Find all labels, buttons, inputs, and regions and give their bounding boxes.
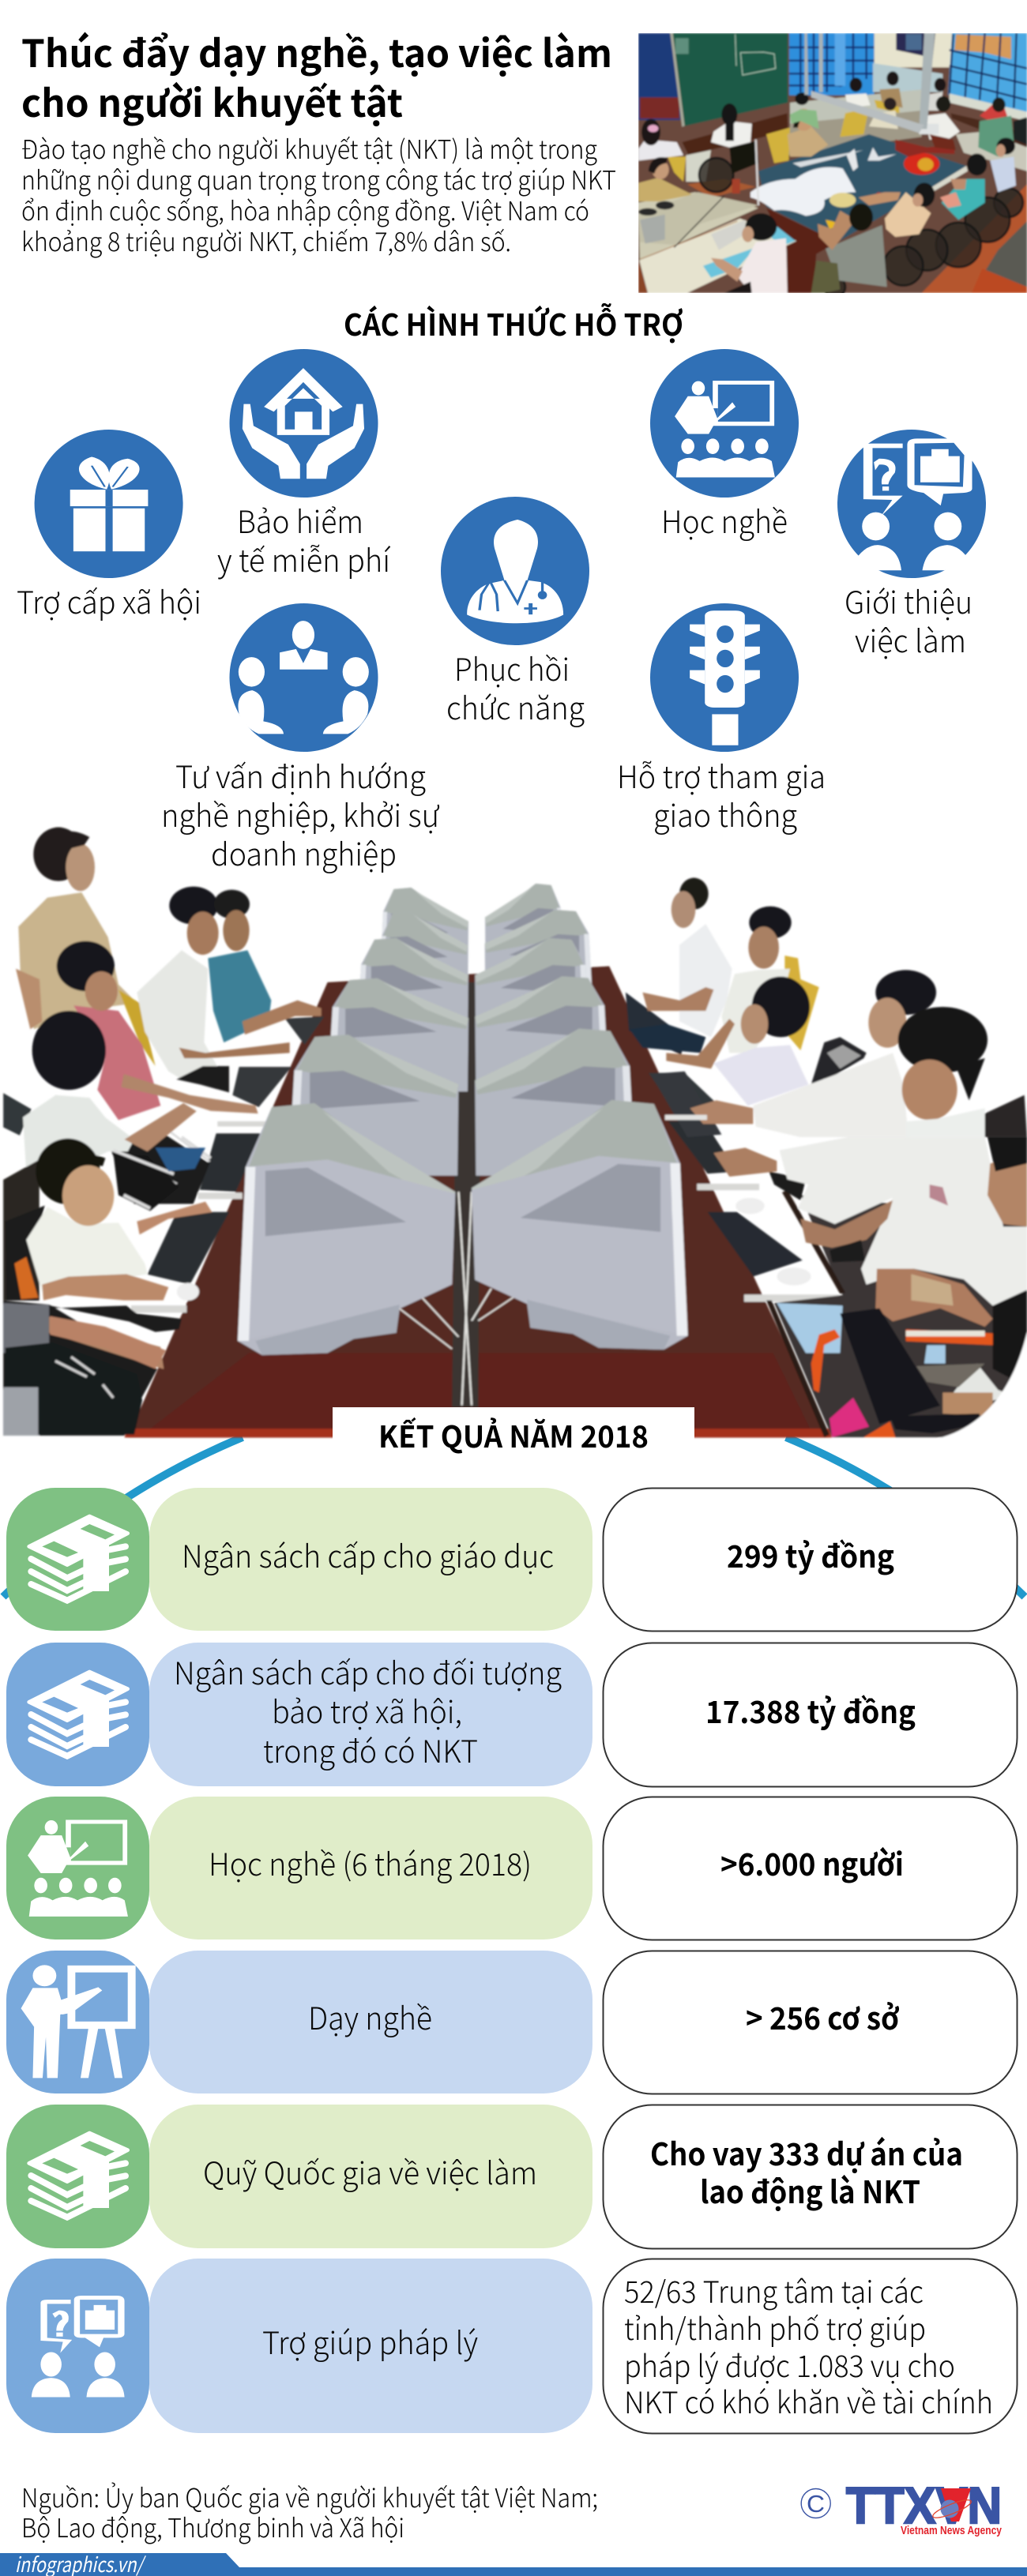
row: national employment fund xyxy=(6,2105,1018,2249)
row: legal aid: 52/63 Trung tâm tại các xyxy=(624,2268,924,2311)
title: cho người khuyết tật xyxy=(21,73,403,128)
icon: house in hands xyxy=(243,368,364,479)
intro text xyxy=(21,129,616,259)
row: legal aid: pháp lý được 1.083 vụ cho xyxy=(624,2342,955,2386)
row: legal aid: NKT có khó khăn về tài chính xyxy=(624,2379,993,2422)
item: career counselling: doanh nghiệp xyxy=(211,831,397,875)
intro text: những nội dung quan trọng trong công tác trợ giúp NKT xyxy=(21,160,616,197)
row: social protection budget: Ngân sách cấp cho đối tượng xyxy=(174,1650,562,1694)
row: national employment fund: lao động là NKT xyxy=(700,2169,920,2213)
icon: money stack xyxy=(29,2133,128,2217)
row: social protection budget xyxy=(6,1643,1018,1786)
title xyxy=(21,23,612,128)
intro text: ổn định cuộc sống, hòa nhập cộng đồng. Việt Nam có xyxy=(21,190,589,228)
intro text: khoảng 8 triệu người NKT, chiếm 7,8% dân số. xyxy=(21,221,511,259)
left people, upper xyxy=(16,828,322,1137)
row: social protection budget: 17.388 tỷ đồng xyxy=(705,1688,916,1733)
right people, upper xyxy=(630,878,1027,1137)
item: career counselling xyxy=(161,603,440,875)
source note: Nguồn: Ủy ban Quốc gia về người khuyết tật Việt Nam; xyxy=(21,2477,598,2515)
row: vocational teaching xyxy=(6,1951,1018,2094)
row: legal aid xyxy=(6,2259,1018,2434)
item: traffic support: Hỗ trợ tham gia xyxy=(617,753,826,798)
item: vocational training: Học nghề xyxy=(661,498,788,543)
item: social allowance: Trợ cấp xã hội xyxy=(17,579,201,623)
icon: money stack xyxy=(29,1672,128,1756)
icon: doctor xyxy=(467,520,563,623)
row: national employment fund: Quỹ Quốc gia về việc làm xyxy=(203,2150,537,2194)
icon: teacher with audience xyxy=(28,1820,128,1917)
decorative arc behind results xyxy=(3,1437,1025,1597)
row: education budget: Ngân sách cấp cho giáo dục xyxy=(182,1533,554,1577)
icon: job talk xyxy=(852,438,972,570)
item: career counselling: nghề nghiệp, khởi sự xyxy=(161,792,440,836)
row: social protection budget: trong đó có NKT xyxy=(263,1728,478,1772)
logo: TTXVN: TTXVN xyxy=(846,2476,1002,2534)
item: career counselling: Tư vấn định hướng xyxy=(175,753,426,798)
intro text: Đào tạo nghề cho người khuyết tật (NKT) là một trong xyxy=(21,129,597,167)
item: rehabilitation: Phục hồi xyxy=(454,646,570,690)
icon: teacher at easel xyxy=(21,1965,136,2078)
icon: traffic light xyxy=(690,610,760,745)
source note xyxy=(21,2477,598,2545)
row: legal aid: tỉnh/thành phố trợ giúp xyxy=(624,2305,926,2349)
icon: money stack xyxy=(29,1516,128,1601)
icon: gift xyxy=(70,457,148,551)
item: job referral: việc làm xyxy=(855,618,966,662)
row: vocational learning: >6.000 người xyxy=(720,1841,904,1885)
logo: TTXVN xyxy=(801,2476,1002,2537)
logo: TTXVN: Vietnam News Agency xyxy=(901,2525,1002,2537)
row: vocational teaching: Dạy nghề xyxy=(308,1995,432,2039)
row: education budget xyxy=(6,1488,1018,1632)
row: vocational teaching: > 256 cơ sở xyxy=(746,1995,900,2039)
photo: sewing workshop xyxy=(638,33,1027,298)
right people, lower xyxy=(713,1137,1027,1439)
row: social protection budget: bảo trợ xã hội, xyxy=(272,1688,462,1733)
footer bar xyxy=(0,2549,1027,2576)
item: vocational training xyxy=(650,349,799,543)
left people, girl and wheelchair xyxy=(4,1137,212,1435)
item: rehabilitation xyxy=(441,497,589,729)
item: traffic support: giao thông xyxy=(653,792,797,836)
heading: results 2018 xyxy=(333,1407,694,1470)
row: education budget: 299 tỷ đồng xyxy=(727,1533,894,1577)
item: free health insurance xyxy=(217,349,391,581)
item: free health insurance: y tế miễn phí xyxy=(217,537,391,581)
item: job referral xyxy=(837,430,986,662)
row: vocational learning: Học nghề (6 tháng 2018) xyxy=(209,1841,532,1885)
item: rehabilitation: chức năng xyxy=(446,685,585,729)
photo: computer class xyxy=(3,828,1027,1439)
item: job referral: Giới thiệu xyxy=(845,579,972,623)
item: social allowance xyxy=(17,430,201,623)
title: Thúc đẩy dạy nghề, tạo việc làm xyxy=(21,23,612,78)
item: free health insurance: Bảo hiểm xyxy=(237,498,363,543)
logo: TTXVN: C xyxy=(807,2490,825,2518)
heading: support forms: CÁC HÌNH THỨC HỖ TRỢ xyxy=(344,301,683,344)
item: traffic support xyxy=(617,603,826,836)
icon: counselling group xyxy=(238,621,369,734)
row: legal aid: Trợ giúp pháp lý xyxy=(262,2319,478,2364)
icon: teacher with audience xyxy=(675,381,775,477)
icon: legal aid talk xyxy=(32,2296,125,2397)
source note: Bộ Lao động, Thương binh và Xã hội xyxy=(21,2507,404,2545)
row: vocational learning xyxy=(6,1797,1018,1940)
heading: results 2018: KẾT QUẢ NĂM 2018 xyxy=(378,1413,649,1456)
row: national employment fund: Cho vay 333 dự án của xyxy=(650,2131,963,2175)
